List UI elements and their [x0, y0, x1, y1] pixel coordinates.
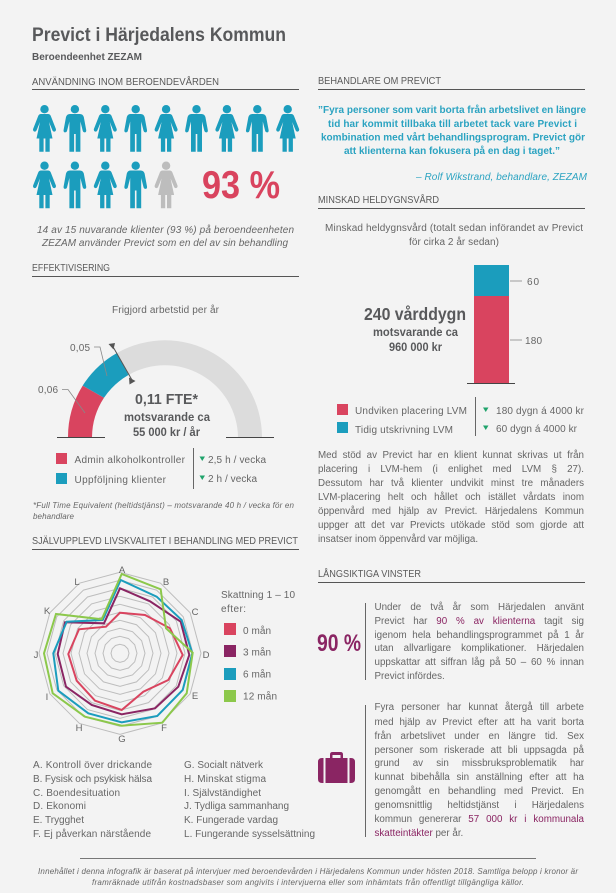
divider: 90 % [364, 603, 366, 680]
gauge remainder [117, 340, 262, 437]
paragraph: heldygnsvård: Dessutom har två klienter undvikit minst tre månaders [318, 478, 584, 489]
big number: 93 %: 93 % [202, 164, 280, 207]
gauge chart [38, 340, 274, 439]
radar key: A–F: D. Ekonomi [33, 801, 86, 812]
big number: 90 %: 90 % [317, 630, 361, 657]
radar axis labels: K [44, 606, 51, 617]
radar chart [34, 565, 210, 745]
paragraph: 90 %: Previct har 90 % av klienterna tagit sig [374, 616, 584, 627]
gauge legend: Uppföljning klienter [74, 475, 167, 486]
gauge centre text [124, 391, 211, 439]
paragraph: 90 %: igenom hela behandlingsprogrammet på 1 år [374, 630, 584, 641]
gauge segment: admin [68, 386, 104, 437]
radar key: A–F: E. Trygghet [33, 815, 84, 826]
radar legend [221, 590, 295, 702]
bar callout: motsvarande ca [373, 327, 459, 339]
footer note [38, 867, 578, 887]
series: 6 mån [53, 580, 192, 722]
gauge marker [108, 343, 136, 384]
heading: långsiktiga vinster: LÅNGSIKTIGA VINSTER [318, 567, 421, 580]
paragraph: arbete: kommun genererar 57 000 kr i kommunala [374, 814, 584, 825]
divider: arbete [364, 705, 366, 837]
bar legend: Undviken placering LVM [355, 406, 467, 417]
gauge leader: 0,05 [70, 343, 107, 376]
paragraph: heldygnsvård: insatser inom öppenvård var möjliga. [318, 534, 478, 545]
heading: livskvalitet: SJÄLVUPPLEVD LIVSKVALITET I BEHANDLING MED PREVICT [32, 535, 298, 547]
series: 12 mån [44, 574, 193, 726]
radar key: A–F: B. Fysisk och psykisk hälsa [33, 774, 152, 785]
paragraph: arbete: grund av sin missbruksproblematik har [374, 758, 584, 769]
stacked bar chart [467, 265, 542, 384]
paragraph: 90 %: Previct infördes. [374, 671, 445, 682]
icon: briefcase [318, 752, 355, 783]
gauge centre text: 0,11 FTE* [135, 391, 198, 408]
bar segment: 60 [474, 265, 509, 296]
paragraph: 90 %: Under de två år som Härjedalen använt [374, 602, 584, 613]
footer note: framräknade utifrån kostnadsbaser som angivits i intervjuerna eller som inhämtats från offentligt tillgängliga källor. [92, 878, 524, 887]
paragraph: arbete: kunnat bibehålla sin anställning efter att ha [374, 772, 584, 783]
radar axis labels: F [161, 723, 167, 734]
radar axis labels [34, 565, 210, 745]
radar axis labels: I [46, 692, 48, 703]
gauge legend: 2 h / vecka [208, 474, 257, 485]
caption: usage [37, 224, 294, 249]
gauge leader: 0,06 [38, 385, 85, 413]
paragraph: heldygnsvård: placering i LVM-hem (i enlighet med LVM § 27). [318, 464, 584, 475]
radar axis labels: J [34, 650, 39, 661]
bar callout [364, 304, 466, 354]
radar axis labels: G [118, 734, 126, 745]
paragraph: heldygnsvård [318, 450, 584, 545]
gauge leader: 0,05: 0,05 [70, 343, 90, 354]
footnote: FTE: behandlare [33, 512, 75, 521]
paragraph: arbete [374, 702, 584, 839]
radar axis labels: H [76, 723, 83, 734]
bar legend: 180 dygn á 4000 kr [496, 406, 585, 417]
caption: usage: ZEZAM använder Previct som en del av sin behandling [41, 238, 288, 249]
bar callout: 240 vårddygn [364, 304, 466, 324]
heading: heldygnsvård: MINSKAD HELDYGNSVÅRD [318, 193, 439, 206]
paragraph: arbete: personer som riskerade att bli uppsagda på [374, 745, 584, 756]
radar key: A–F: F. Ej påverkan närstående [33, 828, 151, 840]
bar label: 60: 60 [527, 277, 539, 288]
radar legend: 6 mån [243, 668, 271, 680]
bar baseline [467, 382, 515, 384]
paragraph: 90 %: uppskattar att siffran låg på 50 – 60 % innan [374, 657, 584, 668]
radar legend: 12 mån [243, 690, 277, 702]
radar key: G–L: H. Minskat stigma [184, 774, 266, 785]
quote [318, 104, 586, 157]
paragraph: arbete: genomsnittlig heltidstjänst i Härjedalens [374, 800, 584, 811]
paragraph: heldygnsvård: öppenvård med hjälp av Previct. Härjedalens Kommun [318, 506, 584, 517]
series: 3 mån [58, 588, 189, 714]
radar axis labels: L [74, 577, 80, 588]
bar legend [337, 397, 585, 436]
bar legend: 60 dygn á 4000 kr [496, 424, 578, 435]
title: Previct i Härjedalens Kommun [32, 25, 286, 46]
radar legend: Skattning 1 – 10 [221, 590, 295, 601]
radar axis labels: B [163, 577, 169, 588]
bar chart title: Minskad heldygnsvård (totalt sedan införandet av Previct [325, 222, 583, 234]
radar axis labels: D [203, 650, 210, 661]
gauge leader: 0,06: 0,06 [38, 385, 58, 396]
bar label: 180: 180 [525, 336, 542, 347]
footer note: Innehållet i denna infografik är baserat på intervjuer med beroendevården i Härjedalens Kommun under hösten 2018. Samtliga belopp i kronor är [38, 867, 578, 876]
radar key: A–F [33, 760, 152, 840]
paragraph: arbete: genomgått en behandling med Previct. En [374, 786, 584, 797]
radar key: G–L: G. Socialt nätverk [184, 760, 264, 771]
gauge baselines [57, 436, 274, 438]
radar axis labels: E [192, 691, 198, 702]
quote: kombination med vårt behandlingsprogram. Previct gör [321, 132, 585, 144]
paragraph: arbete: skatteintäkter per år. [374, 828, 463, 839]
paragraph: heldygnsvård: Med stöd av Previct har en klient kunnat skrivas ut från [318, 450, 584, 461]
gauge centre text: motsvarande ca [124, 412, 211, 424]
quote attribution: – Rolf Wikstrand, behandlare, ZEZAM [415, 172, 588, 183]
gauge legend: Admin alkoholkontroller [74, 455, 186, 466]
gauge legend [56, 448, 266, 489]
radar key: G–L: L. Fungerande sysselsättning [184, 829, 315, 840]
radar key: A–F: A. Kontroll över drickande [33, 760, 152, 771]
series: 0 mån [68, 613, 183, 710]
paragraph: arbete: från arbetslivet under en längre tid. Sex [374, 731, 584, 742]
paragraph: heldygnsvård: uppger att det var Previcts utökade stöd som gjorde att [318, 520, 584, 531]
quote: tid har kommit tillbaka till arbetet tack vare Previct i [328, 119, 577, 130]
bar chart title [325, 222, 583, 248]
gauge centre text: 55 000 kr / år [133, 427, 200, 439]
heading: användning: ANVÄNDNING INOM BEROENDEVÅRDEN [32, 75, 219, 88]
gauge title: Frigjord arbetstid per år [112, 304, 220, 316]
radar axis labels: C [192, 607, 199, 618]
footnote: FTE [33, 501, 295, 521]
footnote: FTE: *Full Time Equivalent (heltidstjänst) – motsvarande 40 h / vecka för en [33, 501, 295, 510]
paragraph: arbete: med hjälp av Previct efter att ha varit borta [374, 717, 584, 728]
heading: effektivisering: EFFEKTIVISERING [32, 263, 110, 274]
footer rule [80, 858, 536, 860]
radar legend: 0 mån [243, 625, 271, 637]
quote: att klienterna kan fokusera på en dag i taget.” [344, 145, 560, 157]
radar key: G–L [184, 760, 315, 840]
pictogram: 14 of 15 clients [33, 105, 299, 208]
caption: usage: 14 av 15 nuvarande klienter (93 %) på beroendeenheten [37, 224, 294, 236]
paragraph: 90 %: utan allvarligare komplikationer. Härjedalen [374, 643, 584, 654]
bar segment: 180 [474, 296, 509, 383]
bar callout: 960 000 kr [389, 342, 442, 354]
radar key: A–F: C. Boendesituation [33, 788, 120, 799]
subtitle: Beroendeenhet ZEZAM [32, 51, 142, 63]
paragraph: arbete: Fyra personer har kunnat återgå till arbete [374, 702, 584, 713]
paragraph: heldygnsvård: LVM-placering helt och hållet och istället vårdats inom [318, 492, 584, 503]
gauge segment: uppföljning [83, 353, 128, 398]
paragraph: 90 % [374, 602, 584, 682]
radar axis labels: A [119, 565, 126, 576]
radar legend: 3 mån [243, 646, 271, 658]
quote: ”Fyra personer som varit borta från arbetslivet en längre [318, 104, 586, 116]
gauge legend: 2,5 h / vecka [208, 455, 266, 466]
bar legend: Tidig utskrivning LVM [355, 425, 453, 436]
radar key: G–L: I. Självständighet [184, 788, 261, 799]
heading: behandlare: BEHANDLARE OM PREVICT [318, 76, 441, 87]
bar chart title: för cirka 2 år sedan) [409, 236, 499, 248]
radar legend: efter: [221, 604, 246, 615]
radar key: G–L: J. Tydliga sammanhang [184, 801, 289, 812]
radar key: G–L: K. Fungerade vardag [184, 815, 278, 826]
